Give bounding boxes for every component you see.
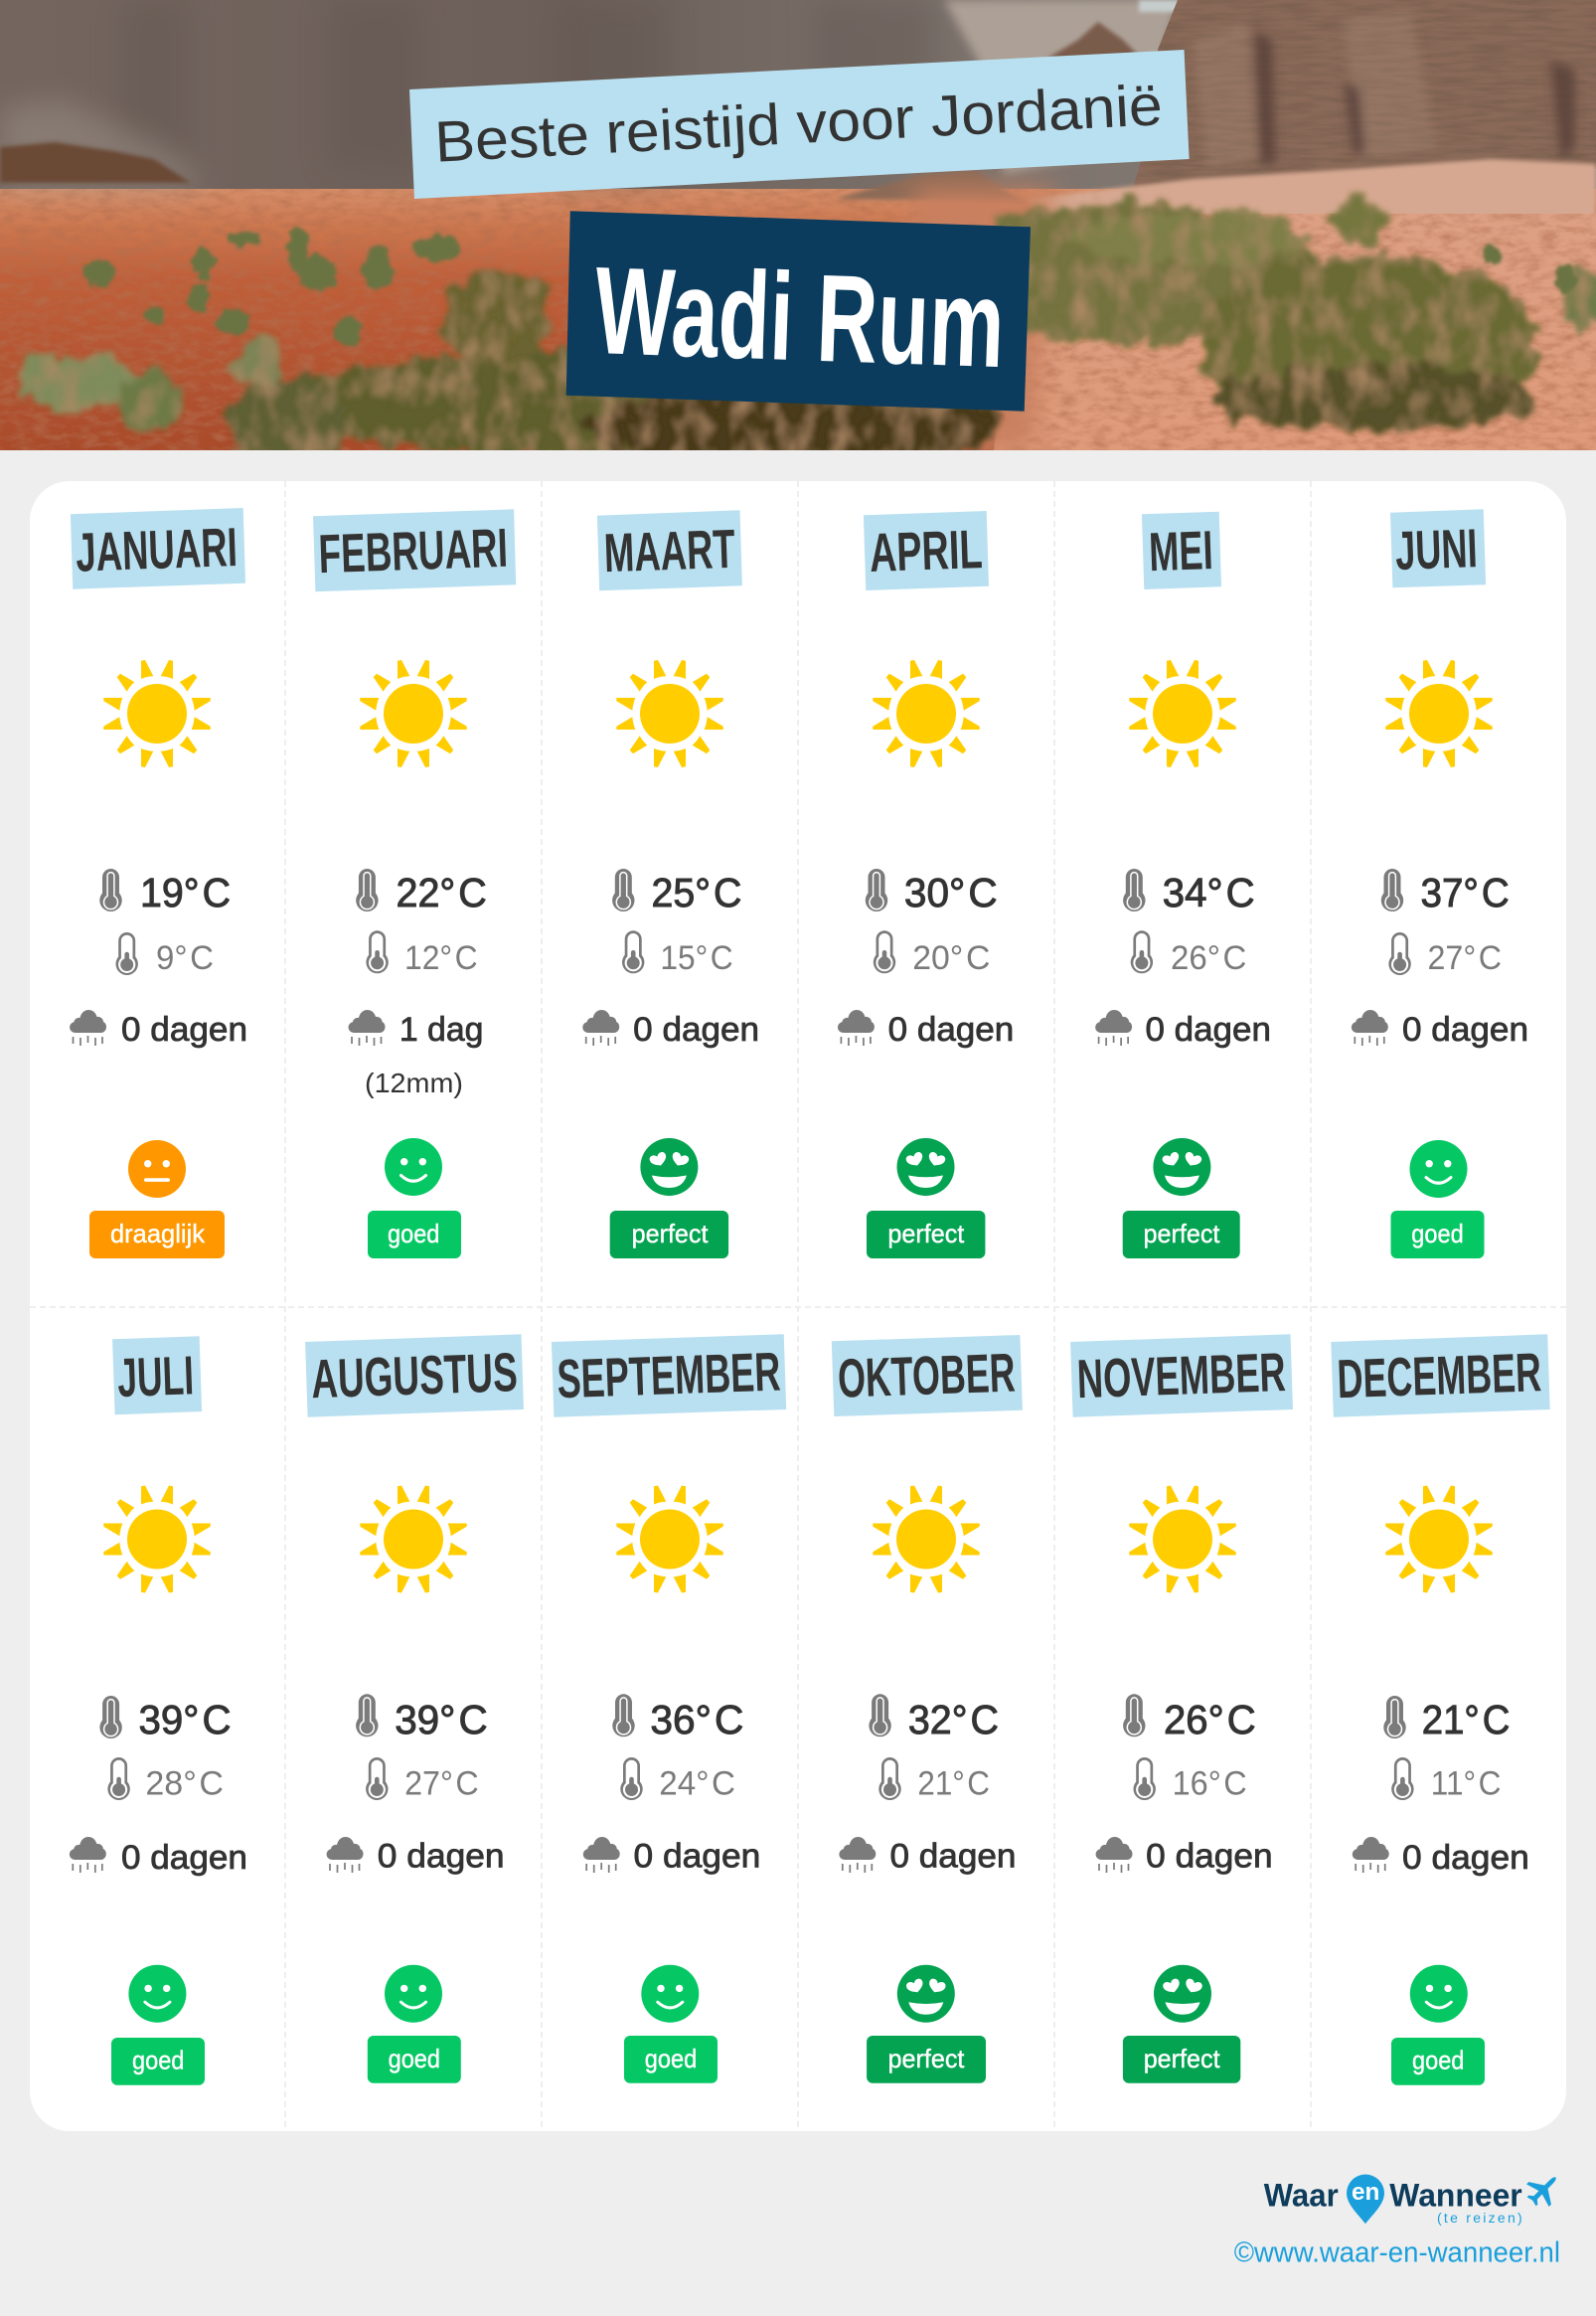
icon: thermometer high <box>99 1696 122 1738</box>
high temperature: 22° C <box>396 870 487 915</box>
icon: rating face <box>128 1140 186 1198</box>
rating badge <box>368 1211 461 1258</box>
icon: thermometer low <box>1133 1757 1156 1800</box>
month heading: AUGUSTUS <box>310 1341 519 1409</box>
icon: rain cloud <box>583 1837 620 1873</box>
high temperature: 39° C <box>395 1697 488 1742</box>
rating badge <box>89 1211 225 1258</box>
rating badge <box>624 2036 718 2083</box>
icon: rating face <box>897 1965 955 2023</box>
rain days: 0 dagen <box>1146 1837 1273 1875</box>
high temperature: 21° C <box>1422 1697 1510 1742</box>
month heading: JANUARI <box>75 516 239 583</box>
rating badge <box>1123 2036 1240 2083</box>
icon: thermometer low <box>1391 1757 1414 1800</box>
rain days: 0 dagen <box>1402 1011 1528 1049</box>
month heading <box>305 1334 524 1417</box>
icon: sun <box>873 660 980 767</box>
low temperature: 20° C <box>912 939 990 977</box>
icon: airplane <box>1520 2166 1567 2213</box>
rating badge <box>867 1211 985 1258</box>
icon: thermometer low <box>1388 932 1411 975</box>
icon: thermometer low <box>620 1757 643 1800</box>
icon: sun <box>1385 660 1493 767</box>
high temperature: 30° C <box>904 870 998 915</box>
icon: sun <box>360 1485 467 1592</box>
icon: thermometer high <box>356 1694 378 1737</box>
rating badge: goed <box>132 2046 184 2075</box>
icon: sun <box>1385 1485 1493 1592</box>
icon: rain cloud <box>1095 1010 1132 1046</box>
month heading: SEPTEMBER <box>556 1340 781 1409</box>
low temperature: 28° C <box>145 1765 224 1803</box>
rating badge: goed <box>1412 2046 1464 2075</box>
month heading <box>1142 512 1221 589</box>
rating badge <box>368 2036 461 2083</box>
logo word: Wanneer <box>1389 2177 1522 2213</box>
month heading: NOVEMBER <box>1076 1341 1287 1409</box>
icon: thermometer low <box>366 1757 388 1800</box>
pin label: en <box>1352 2179 1379 2206</box>
rating badge: perfect <box>1144 2044 1220 2073</box>
high temperature: 36° C <box>650 1697 743 1742</box>
rain days: 0 dagen <box>1402 1839 1529 1877</box>
column: juli <box>70 1336 247 2085</box>
icon: thermometer high <box>869 1694 891 1737</box>
high temperature: 34° C <box>1163 870 1255 915</box>
icon: rating face <box>896 1138 954 1196</box>
rating badge <box>111 2038 205 2085</box>
icon: rating face <box>641 1965 699 2023</box>
rating badge: draaglijk <box>110 1219 206 1248</box>
month heading: FEBRUARI <box>318 517 509 584</box>
logo tagline: (te reizen) <box>1437 2210 1522 2226</box>
rain days: 0 dagen <box>378 1837 505 1875</box>
rain days: 1 dag <box>399 1011 483 1049</box>
icon: thermometer low <box>878 1757 901 1800</box>
month heading <box>71 508 245 589</box>
rating badge: perfect <box>887 1219 965 1248</box>
month heading <box>313 509 516 591</box>
icon: thermometer high <box>612 869 634 911</box>
month heading <box>597 510 742 590</box>
rain days: 0 dagen <box>121 1839 247 1877</box>
icon: sun <box>1129 660 1236 767</box>
month heading: APRIL <box>869 518 984 583</box>
icon: rain cloud <box>70 1010 106 1046</box>
column: maart <box>582 510 759 1258</box>
icon: thermometer low <box>366 930 389 973</box>
rain days: 0 dagen <box>121 1011 247 1049</box>
website credit: ©www.waar-en-wanneer.nl <box>1234 2237 1560 2269</box>
rainfall amount: (12mm) <box>365 1068 463 1098</box>
rating badge <box>867 2036 986 2083</box>
column: september <box>552 1334 786 2083</box>
title banner: Wadi Rum <box>566 211 1031 412</box>
month heading: JULI <box>116 1344 195 1408</box>
icon: rating face <box>385 1138 442 1196</box>
rating badge <box>1391 2038 1485 2085</box>
logo: Waar en Wanneer <box>1264 2166 1567 2226</box>
rating badge <box>610 1211 728 1258</box>
icon: rain cloud <box>70 1837 106 1873</box>
low temperature: 16° C <box>1173 1765 1247 1803</box>
icon: rain cloud <box>327 1837 364 1873</box>
rating badge: goed <box>388 1219 439 1248</box>
icon: rain cloud <box>838 1010 875 1046</box>
rain days: 0 dagen <box>890 1837 1016 1875</box>
low temperature: 27° C <box>404 1765 479 1803</box>
icon: sun <box>873 1485 980 1592</box>
high temperature: 19° C <box>140 870 231 915</box>
icon: rating face <box>1409 1140 1467 1198</box>
column: januari <box>70 508 247 1258</box>
month heading <box>1390 509 1486 587</box>
icon: sun <box>1129 1485 1236 1592</box>
column: november <box>1070 1334 1293 2083</box>
rain days: 0 dagen <box>633 1011 759 1049</box>
icon: thermometer low <box>1131 930 1153 973</box>
low temperature: 27° C <box>1427 939 1502 977</box>
low temperature: 11° C <box>1431 1765 1501 1803</box>
low temperature: 24° C <box>659 1765 735 1803</box>
rating badge <box>1123 1211 1240 1258</box>
high temperature: 26° C <box>1164 1697 1256 1742</box>
icon: rain cloud <box>1353 1837 1389 1873</box>
icon: rating face <box>128 1965 186 2023</box>
icon: rating face <box>640 1138 698 1196</box>
icon: sun <box>616 660 723 767</box>
icon: rating face <box>385 1965 442 2023</box>
rain days: 0 dagen <box>888 1011 1014 1049</box>
low temperature: 26° C <box>1171 939 1246 977</box>
column: oktober <box>832 1335 1023 2083</box>
month heading <box>1070 1334 1293 1417</box>
month heading <box>552 1334 786 1417</box>
title banner: Wadi Rum: Wadi Rum <box>592 242 1007 394</box>
low temperature: 9° C <box>156 939 214 977</box>
icon: thermometer high <box>1381 869 1403 911</box>
icon: map pin <box>1347 2175 1384 2224</box>
month heading <box>832 1335 1023 1416</box>
column: december <box>1331 1334 1550 2085</box>
low temperature: 15° C <box>660 939 733 977</box>
icon: rain cloud <box>349 1010 386 1046</box>
rain days: 0 dagen <box>1145 1011 1271 1049</box>
month heading: OKTOBER <box>837 1341 1017 1409</box>
icon: rain cloud <box>582 1010 619 1046</box>
icon: thermometer high <box>356 869 379 911</box>
icon: thermometer high <box>1123 1694 1145 1737</box>
icon: rating face <box>1410 1965 1468 2023</box>
icon: thermometer low <box>622 930 644 973</box>
icon: thermometer high <box>1123 869 1145 911</box>
rating badge: goed <box>389 2044 440 2073</box>
month heading <box>864 511 989 590</box>
icon: rating face <box>1154 1965 1211 2023</box>
icon: thermometer high <box>1383 1696 1406 1738</box>
logo: Waar en Wanneer: Waar <box>1264 2177 1339 2213</box>
icon: sun <box>616 1485 723 1592</box>
panel: monthly calendar card <box>30 481 1566 2131</box>
high temperature: 25° C <box>652 870 741 915</box>
icon: thermometer low <box>874 930 895 973</box>
column: april <box>838 511 1014 1258</box>
icon: rating face <box>1153 1138 1210 1196</box>
icon: thermometer low <box>107 1757 130 1800</box>
title banner: Beste reistijd voor Jordanië <box>409 50 1190 199</box>
title banner: Beste reistijd voor Jordanië: Beste reistijd voor Jordanië <box>433 73 1164 175</box>
rating badge: goed <box>645 2044 697 2073</box>
icon: thermometer high <box>866 869 887 911</box>
rating badge <box>1391 1211 1485 1258</box>
rating badge: perfect <box>1143 1219 1220 1248</box>
high temperature: 37° C <box>1421 870 1510 915</box>
icon: sun <box>360 660 467 767</box>
icon: thermometer low <box>115 932 138 975</box>
rating badge: perfect <box>888 2044 965 2073</box>
rating badge: perfect <box>632 1219 709 1248</box>
icon: thermometer high <box>99 869 122 911</box>
rating badge: goed <box>1411 1219 1464 1248</box>
icon: rain cloud <box>1352 1010 1388 1046</box>
column: juni <box>1352 509 1528 1258</box>
icon: sun <box>103 1485 211 1592</box>
month heading: MEI <box>1148 519 1214 582</box>
icon: sun <box>103 660 211 767</box>
column: augustus <box>305 1334 524 2083</box>
high temperature: 32° C <box>908 1697 999 1742</box>
rain days: 0 dagen <box>634 1837 760 1875</box>
icon: rain cloud <box>839 1837 876 1873</box>
month heading: MAART <box>603 518 736 583</box>
low temperature: 21° C <box>917 1765 990 1803</box>
month heading: JUNI <box>1394 517 1479 581</box>
column: februari <box>313 509 516 1258</box>
month heading <box>112 1336 202 1414</box>
icon: thermometer high <box>612 1694 635 1737</box>
hero photo: Wadi Rum desert <box>0 0 1596 467</box>
low temperature: 12° C <box>404 939 478 977</box>
column: mei <box>1095 512 1271 1258</box>
icon: rain cloud <box>1096 1837 1133 1873</box>
high temperature: 39° C <box>139 1697 231 1742</box>
